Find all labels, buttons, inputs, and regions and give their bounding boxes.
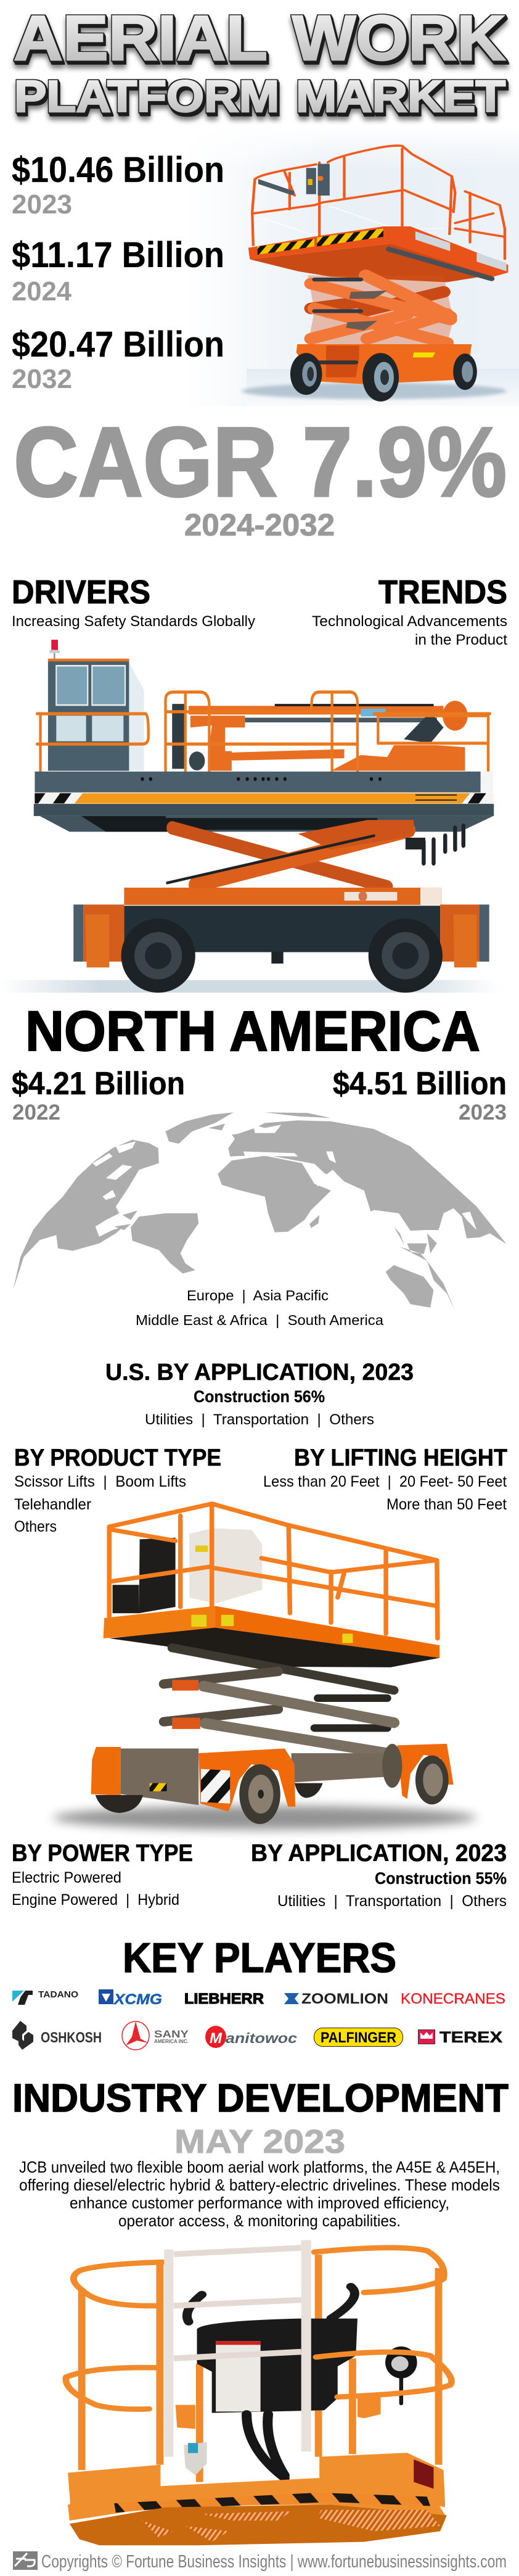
other regions list: Europe | Asia Pacific <box>187 1287 329 1303</box>
by power type: Electric Powered <box>12 1869 121 1886</box>
U.S. by application: Construction 56% <box>194 1387 325 1406</box>
trends: TRENDS <box>378 574 507 611</box>
date: MAY 2023 <box>174 2123 345 2160</box>
drivers <box>12 574 255 630</box>
logo: Sany: AMERICA INC. <box>154 2039 189 2044</box>
logo: Manitowoc <box>205 2026 297 2048</box>
by application: Utilities | Transportation | Others <box>277 1893 507 1910</box>
stat: 2023 market size: 2023 <box>12 189 72 220</box>
by application: BY APPLICATION, 2023 <box>251 1840 507 1867</box>
by product type: Scissor Lifts | Boom Lifts <box>14 1473 186 1490</box>
stat: north america 2022 <box>12 1066 185 1125</box>
logo: Palfinger: PALFINGER <box>321 2029 396 2046</box>
trends <box>312 574 507 648</box>
development description: offering diesel/electric hybrid & battery-electric drivelines. These models <box>19 2176 500 2194</box>
by product type: BY PRODUCT TYPE <box>14 1445 221 1471</box>
stat: north america 2022: $4.21 Billion <box>12 1066 185 1102</box>
CAGR callout: 2024-2032 <box>184 508 335 542</box>
stat: north america 2023: 2023 <box>459 1100 507 1125</box>
logo: Terex: TEREX <box>439 2029 502 2046</box>
by lifting height: More than 50 Feet <box>386 1496 507 1513</box>
stat: north america 2022: 2022 <box>12 1100 60 1125</box>
logo: Liebherr: LIEBHERR <box>184 1991 264 2007</box>
region heading: NORTH AMERICA <box>25 1000 480 1063</box>
by power type: BY POWER TYPE <box>12 1840 193 1867</box>
world map <box>13 1112 507 1311</box>
stat: 2024 market size: $11.17 Billion <box>12 235 224 275</box>
title <box>14 2 505 122</box>
logo: XCMG: XCMG <box>113 1991 162 2008</box>
logo: Oshkosh: OSHKOSH <box>41 2029 102 2046</box>
by lifting height: BY LIFTING HEIGHT <box>294 1445 507 1471</box>
industry development heading: INDUSTRY DEVELOPMENT <box>12 2076 509 2120</box>
illustration: scissor lift three-quarter view <box>53 1504 476 1830</box>
illustration: orange scissor lift <box>242 146 508 402</box>
logo: XCMG <box>99 1989 162 2008</box>
logo: Sany <box>122 2021 189 2050</box>
U.S. by application: U.S. BY APPLICATION, 2023 <box>105 1360 414 1385</box>
stat: 2032 market size <box>12 324 224 394</box>
logo: Sany: SANY <box>154 2028 189 2040</box>
by lifting height: Less than 20 Feet | 20 Feet- 50 Feet <box>263 1473 507 1490</box>
logo: Manitowoc: anitowoc <box>226 2030 297 2046</box>
development description: enhance customer performance with improved efficiency, <box>70 2194 449 2212</box>
stat: north america 2023 <box>333 1066 507 1125</box>
panel: scissor lift photo background <box>185 126 519 406</box>
logo: Oshkosh <box>12 2021 102 2050</box>
key players heading: KEY PLAYERS <box>123 1934 396 1981</box>
stat: 2023 market size <box>12 150 224 220</box>
logo: Terex <box>418 2029 502 2046</box>
by power type: Engine Powered | Hybrid <box>12 1891 179 1909</box>
logo: Manitowoc: M <box>210 2030 223 2047</box>
by power type <box>12 1840 193 1909</box>
U.S. by application <box>105 1360 414 1428</box>
other regions list: Middle East & Africa | South America <box>136 1312 383 1328</box>
trends: in the Product <box>415 632 507 648</box>
stat: 2032 market size: $20.47 Billion <box>12 324 224 365</box>
by product type: Telehandler <box>14 1496 91 1513</box>
title: AERIAL <box>14 2 268 73</box>
drivers: Increasing Safety Standards Globally <box>12 613 255 630</box>
stat: 2024 market size: 2024 <box>12 276 72 307</box>
logo: Zoomlion: ZOOMLION <box>301 1991 388 2007</box>
title: MARKET <box>296 72 505 122</box>
by product type: Others <box>14 1518 57 1535</box>
trends: Technological Advancements <box>312 613 507 630</box>
illustration: side view scissor lift <box>0 640 500 993</box>
U.S. by application: Utilities | Transportation | Others <box>145 1411 374 1428</box>
other regions list <box>136 1287 383 1328</box>
development description: operator access, & monitoring capabilities. <box>118 2211 401 2230</box>
logo: Tadano: TADANO <box>38 1989 78 2000</box>
by application: Construction 55% <box>375 1869 507 1888</box>
footer logo <box>13 2551 38 2570</box>
stat: 2032 market size: 2032 <box>12 364 72 394</box>
stat: 2024 market size <box>12 235 224 307</box>
title: PLATFORM <box>14 72 279 122</box>
logo: Tadano <box>12 1989 78 2005</box>
by application <box>251 1840 507 1910</box>
illustration: boom lift basket <box>66 2240 451 2545</box>
stat: north america 2023: $4.51 Billion <box>333 1066 507 1102</box>
stat: 2023 market size: $10.46 Billion <box>12 150 224 190</box>
logo: Konecranes: KONECRANES <box>401 1991 505 2007</box>
development description <box>19 2158 500 2230</box>
title: WORK <box>292 2 505 73</box>
by lifting height <box>263 1445 507 1513</box>
drivers: DRIVERS <box>12 574 150 611</box>
by product type <box>14 1445 221 1535</box>
